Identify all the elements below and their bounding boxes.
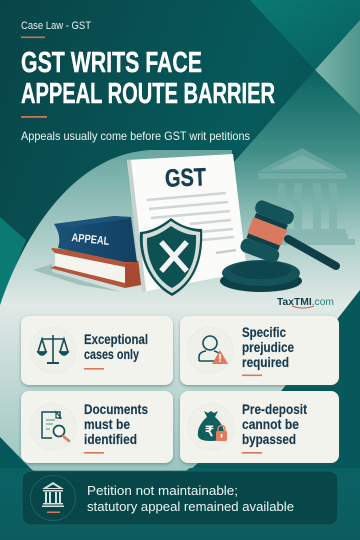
icon: money bag with lock	[198, 411, 227, 441]
outcome text: statutory appeal remained available	[87, 499, 294, 514]
card text: Documents	[84, 401, 148, 417]
subtitle: Appeals usually come before GST writ petitions	[21, 129, 250, 143]
eyebrow rule	[21, 36, 45, 38]
icon: money bag with lock: ₹	[205, 423, 214, 439]
icon: scales	[38, 335, 68, 363]
card: pre-deposit	[180, 391, 339, 463]
card text: cannot be	[242, 416, 299, 432]
card: documents	[21, 391, 173, 463]
eyebrow label: Case Law - GST	[21, 20, 91, 32]
icon: rejection shield	[140, 218, 202, 296]
card text: Exceptional	[84, 331, 148, 347]
card text	[84, 331, 148, 362]
card text	[242, 401, 307, 447]
title: GST WRITS FACE	[21, 47, 202, 79]
icon: gavel	[220, 199, 336, 292]
card text: bypassed	[242, 431, 296, 447]
title	[21, 47, 275, 110]
card text: Specific	[242, 324, 286, 340]
outcome text	[87, 483, 294, 514]
card text: required	[242, 354, 289, 370]
card text: prejudice	[242, 339, 294, 355]
card text: Pre-deposit	[242, 401, 307, 417]
icon: appeal books	[50, 216, 141, 288]
card text: must be	[84, 416, 130, 432]
logo: TaxTMI.com: TaxTMI.com	[277, 296, 334, 308]
illustration shadow	[33, 264, 122, 292]
card text	[242, 324, 294, 370]
card text: identified	[84, 431, 137, 447]
title rule	[21, 116, 47, 118]
outcome text: Petition not maintainable;	[87, 483, 238, 498]
card: exceptional cases	[21, 316, 173, 385]
document heading: GST	[165, 163, 206, 193]
icon: person warning	[199, 336, 228, 364]
icon: faded courthouse	[250, 148, 355, 245]
card text	[84, 401, 148, 447]
icon: GST document	[127, 154, 247, 292]
book label: APPEAL	[71, 232, 110, 248]
card: specific prejudice	[180, 316, 339, 385]
icon: document magnifier	[42, 412, 69, 441]
panel: outcome	[22, 471, 338, 525]
icon: courthouse	[42, 482, 64, 513]
card text: cases only	[84, 346, 139, 362]
